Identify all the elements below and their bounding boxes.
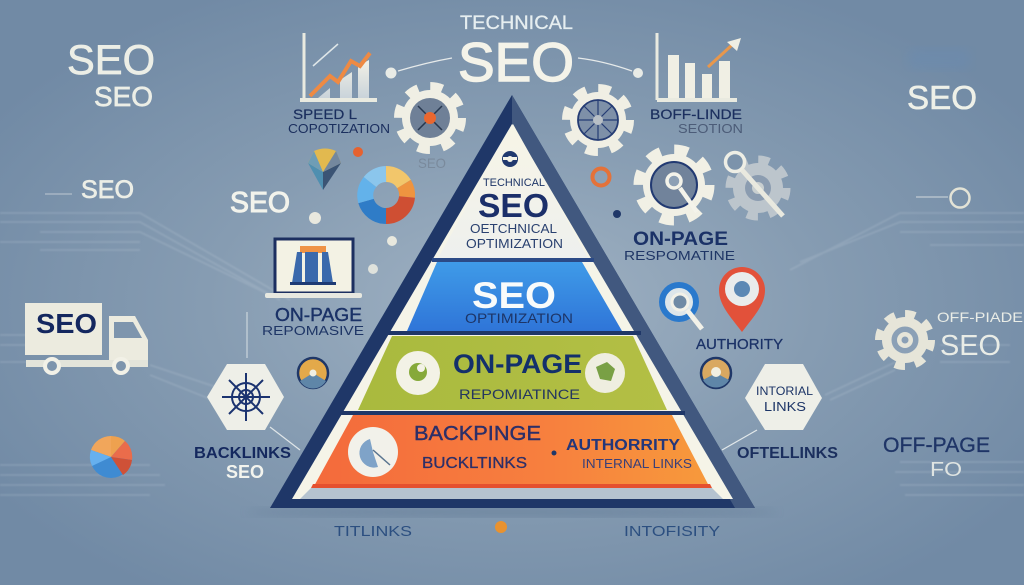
icon: badge left: [298, 358, 328, 389]
icon: grey gear with key: [726, 152, 786, 216]
tier: green on-page: [358, 336, 667, 410]
tier label: backpinge: BACKPINGE: [414, 423, 541, 445]
label: on-page repomasive: ON-PAGE: [275, 305, 362, 325]
tier label: optimization: OPTIMIZATION: [466, 237, 563, 251]
icon: truck: [25, 303, 148, 373]
connector left: [386, 58, 452, 78]
icon: left leaf badge: [396, 351, 440, 395]
pyramid ground shadow: [247, 507, 777, 517]
bottom dot: [495, 521, 507, 533]
chart: donut: [365, 174, 407, 216]
icon: magnifier: [662, 285, 702, 329]
icon: orange ring: [592, 168, 610, 186]
tier label: internal links: INTERNAL LINKS: [582, 456, 692, 471]
label: backlinks SEO: BACKLINKS: [194, 445, 291, 462]
tier label: authority: AUTHORRITY: [566, 437, 680, 454]
icon: ring: [916, 188, 970, 208]
label: backlinks SEO: SEO: [226, 462, 264, 482]
icon: gear far right: [879, 314, 931, 366]
bottom label: titlinks: TITLINKS: [334, 523, 412, 540]
label: speed optimization: COPOTIZATION: [288, 121, 390, 136]
label: off-page SEO right: OFF-PIADE: [937, 309, 1023, 325]
icon: gear right: [567, 89, 629, 151]
heading: technical: TECHNICAL: [460, 12, 573, 34]
label: off-page SEO right: SEO: [940, 330, 1001, 362]
label: off-page bottom right: OFF-PAGE: [883, 433, 990, 457]
pyramid: [270, 95, 755, 508]
label: on-page repomasive: [262, 305, 364, 338]
chart: pie: [90, 436, 132, 478]
icon: hexagon wheel left: [207, 364, 284, 430]
SEO large: SEO: [67, 36, 155, 83]
icon: hexagon internal links: INTORIAL: [756, 384, 813, 398]
tier: technical SEO: [438, 124, 588, 258]
label: speed optimization: SPEED L: [293, 106, 357, 122]
icon: gear magnifier: [639, 150, 709, 220]
label: boff-linde: BOFF-LINDE: [650, 106, 742, 122]
label: boff-linde: SEOTION: [678, 122, 743, 136]
chart: speed trend: [300, 33, 377, 102]
connector right: [578, 58, 643, 78]
left column text: [67, 36, 155, 204]
tier label: oetchnical: OETCHNICAL: [470, 222, 557, 236]
heading: SEO: SEO: [458, 31, 574, 93]
chart: bars with arrow: [657, 33, 741, 102]
icon: small navy sync mark: [502, 151, 518, 167]
label: on-page repomasive: REPOMASIVE: [262, 323, 364, 338]
label: on-page respomatine: RESPOMATINE: [624, 248, 735, 263]
icon: laptop: [265, 239, 362, 298]
icon: right leaf badge: [585, 353, 625, 393]
tier label: SEO: SEO: [478, 187, 549, 224]
icon: hexagon internal links: LINKS: [764, 399, 806, 414]
tier label: on-page: ON-PAGE: [453, 349, 582, 379]
icon: badge right: [701, 358, 731, 388]
SEO small: SEO: [81, 176, 134, 204]
SEO medium: SEO: [94, 81, 153, 112]
label: off-page SEO right: [937, 309, 1023, 362]
tier label: optimization: OPTIMIZATION: [465, 310, 573, 326]
label: authority: AUTHORITY: [696, 337, 783, 353]
truck label: SEO: [36, 308, 97, 339]
icon: hexagon internal links: [745, 364, 822, 430]
icon: gem: [308, 148, 341, 190]
icon: pie badge: [348, 427, 398, 477]
label: off-page bottom right: FO: [930, 459, 962, 481]
tier label: bucklinks: BUCKLTINKS: [422, 455, 527, 472]
label: speed optimization: [288, 106, 390, 136]
label: boff-linde: [650, 106, 743, 136]
top heading: [458, 12, 574, 93]
label: off-page bottom right: [883, 433, 990, 481]
label: on-page respomatine: [624, 229, 735, 263]
tier: orange backlinks: [311, 415, 712, 488]
tier: blue SEO: [407, 262, 622, 331]
faded SEO under gear: SEO: [418, 155, 446, 171]
faded blue smudge: [908, 48, 970, 70]
tier label: SEO white: SEO: [472, 275, 556, 316]
label: oftellinks: OFTELLINKS: [737, 445, 838, 462]
icon: location pin: [719, 267, 765, 332]
bottom label: intofisity: INTOFISITY: [624, 523, 720, 540]
tier label: repomiatince: REPOMIATINCE: [459, 386, 580, 402]
label: on-page respomatine: ON-PAGE: [633, 229, 728, 250]
label: backlinks SEO: [194, 445, 291, 482]
tier label: technical: TECHNICAL: [483, 177, 545, 189]
icon: gear left: [399, 87, 461, 149]
right column SEO: SEO: [907, 79, 977, 116]
SEO near laptop: SEO: [230, 187, 290, 219]
